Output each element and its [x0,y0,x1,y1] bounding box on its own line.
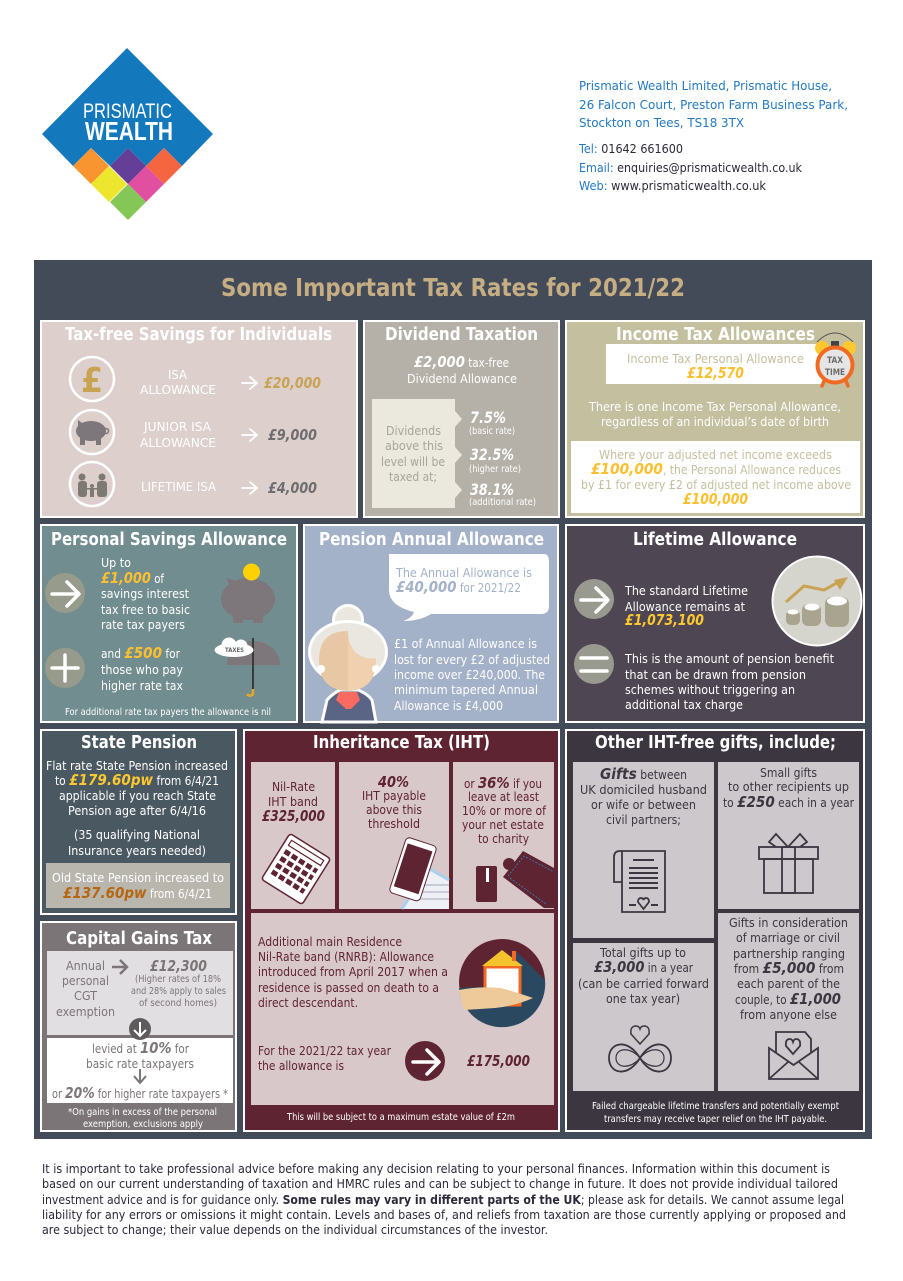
note: This will be subject to a maximum estate value of £2m [286,1112,515,1123]
icon: heart and infinity [609,1026,671,1072]
personal allowance box: £12,570 [687,364,744,382]
box: marriage gifts: from anyone else [740,1008,837,1022]
text: definition: additional tax charge [625,698,743,712]
icon: down arrow circle [129,1018,151,1040]
box: 36 percent [453,762,554,909]
icon: alarm clock [815,333,856,386]
text: up to 1000: tax free to basic [101,603,190,617]
box: 40 percent: IHT payable [362,789,426,803]
row: junior ISA allowance: JUNIOR ISA [143,419,211,434]
box: spouse gifts: UK domiciled husband [580,783,707,797]
contact details: Email: enquiries@prismaticwealth.co.uk [579,161,803,175]
old state pension box: £137.60pw from 6/4/21 [63,884,212,902]
box: spouse gifts: or wife or between [591,798,696,812]
disclaimer: investment advice and is for guidance only. Some rules may vary in different parts of the UK; please ask for details. We cannot assume legal [42,1193,844,1207]
box: marriage gifts [718,913,859,1091]
taper box: Where your adjusted net income exceeds [599,448,832,462]
taper box [571,441,860,513]
panel: tax-free savings [41,321,357,517]
text: flat rate: Pension age after 6/4/16 [68,804,206,818]
text: definition: This is the amount of pension benefit [624,652,834,666]
panel: state pension [41,730,236,914]
heading: other gifts: Other IHT-free gifts, include; [595,733,836,753]
levied box: basic rate taxpayers [86,1057,194,1071]
box: marriage gifts: couple, to £1,000 [735,990,841,1008]
company address: Stockton on Tees, TS18 3TX [579,116,744,130]
icon: paper [402,868,449,909]
title: Some Important Tax Rates for 2021/22 [221,273,685,302]
personal allowance box: Income Tax Personal Allowance [627,352,804,366]
rates: (additional rate) [469,497,536,508]
text: taper: lost for every £2 of adjusted [394,653,550,667]
heading: lifetime allowance: Lifetime Allowance [633,530,797,550]
levied box [47,1038,233,1103]
box: total gifts: Total gifts up to [599,946,686,960]
text: up to 1000: £1,000 of [101,569,165,587]
heading: inheritance tax: Inheritance Tax (IHT) [313,733,490,753]
text: flat rate: applicable if you reach State [59,789,216,803]
row: ISA allowance [140,367,321,397]
pointer box: level will be [381,455,445,469]
box: total gifts: one tax year) [606,992,680,1006]
panel: income tax allowances [566,321,864,517]
icon: piggy bank [70,410,114,454]
levied box: or 20% for higher rate taxpayers * [52,1084,228,1102]
dividend allowance: £2,000 tax-free [414,353,509,371]
box: 40 percent: above this [366,803,422,817]
icon: piggy bank and coin [221,564,275,623]
icon: umbrella with cloud [214,638,280,696]
speech bubble: £40,000 for 2021/22 [396,578,521,596]
icon: equals circle [574,644,614,684]
rates [469,408,536,508]
personal allowance box [606,344,823,384]
contact details [578,142,803,193]
text: RNRB [258,935,448,1010]
box: residence nil-rate band [251,913,554,1105]
panel: other IHT-free gifts [566,730,864,1131]
text: standard allowance: The standard Lifetime [624,584,748,598]
dividend allowance: Dividend Allowance [407,372,517,386]
text: RNRB: Nil-Rate band (RNRB): Allowance [258,950,434,964]
text: standard allowance: £1,073,100 [625,611,704,629]
row: ISA allowance: ISA [168,367,187,382]
text: standard allowance: Allowance remains at [625,600,745,614]
box: total gifts [573,943,714,1091]
text: up to 1000: savings interest [101,587,189,601]
heading: capital gains tax: Capital Gains Tax [66,929,213,949]
box: nil-rate band [251,762,335,909]
exemption box: of second homes) [139,998,217,1009]
text: RNRB: introduced from April 2017 when a [258,965,448,979]
heading: tax-free savings: Tax-free Savings for Individuals [65,325,332,345]
icon: house in hand [459,939,545,1027]
text: flat rate: to £179.60pw from 6/4/21 [55,771,219,789]
text: up to 1000: rate tax payers [101,618,185,632]
value: £175,000 [467,1052,530,1070]
icon: envelope with heart [769,1032,818,1079]
exemption box: (Higher rates of 18% [135,974,221,985]
note: For additional rate tax payers the allowance is nil [65,707,271,718]
heading: pension annual allowance: Pension Annual Allowance [319,530,544,550]
main dark panel [34,260,872,1139]
logo: Prismatic Wealth [42,48,213,220]
row: lifetime ISA: £4,000 [268,479,317,497]
panel: dividend taxation [364,321,559,517]
rates: (basic rate) [469,426,515,437]
panel: capital gains tax [41,922,236,1131]
box: 40 percent: threshold [368,817,420,831]
icon: arrow circle [574,579,614,619]
text: flat rate: (35 qualifying National [74,828,200,842]
row: ISA allowance: £20,000 [264,374,321,392]
box: marriage gifts: from £5,000 from [734,959,844,977]
icon: coins and rising arrow [772,556,862,646]
rates: 32.5% [470,445,514,464]
text: taper: £1 of Annual Allowance is [394,637,537,651]
icon: plus circle [45,648,85,688]
disclaimer: liability for any errors or omissions it might contain. Levels and bases of, and reliefs from taxation are those currently applying or proposed and [42,1208,846,1222]
icon: arrow circle [405,1041,445,1081]
text: and 500 [101,644,183,693]
panel: personal savings allowance [41,525,297,722]
icon: calculator [261,833,331,905]
row: ISA allowance: ALLOWANCE [140,382,216,397]
box: marriage gifts: Gifts in consideration [729,916,848,930]
pointer box: above this [385,439,443,453]
icon: card [476,866,497,902]
footnote [68,1107,217,1130]
text: RNRB: residence is passed on death to a [258,981,439,995]
disclaimer [42,1162,846,1237]
text: taper: minimum tapered Annual [394,683,538,697]
heading: state pension: State Pension [81,733,197,753]
box: small gifts [718,762,859,909]
box: nil-rate band: £325,000 [262,807,325,825]
taper box: £100,000, the Personal Allowance reduces [591,460,841,478]
panel: lifetime allowance [566,525,864,722]
logo: Prismatic Wealth: WEALTH [85,116,173,146]
text: up to 1000 [101,556,190,632]
speech bubble [389,554,549,621]
panel: pension annual allowance [304,525,558,722]
box: marriage gifts: each parent of the [737,977,840,991]
rates: 7.5% [470,408,506,427]
box: 40 percent [339,762,449,909]
box: nil-rate band: IHT band [268,795,318,809]
rates: (higher rate) [469,464,521,475]
heading: personal savings allowance: Personal Savings Allowance [51,530,287,550]
note: transfers may receive taper relief on the IHT payable. [604,1114,827,1125]
box: spouse gifts: civil partners; [606,813,681,827]
footnote: exemption, exclusions apply [83,1119,203,1130]
company address: Prismatic Wealth Limited, Prismatic House, [579,79,832,93]
icon: arrow circle [45,573,85,613]
disclaimer: It is important to take professional advice before making any decision relating to your personal finances. Information within this document is [42,1162,830,1176]
box: small gifts: to other recipients up [728,780,849,794]
icon: pound: £ [81,361,103,401]
pointer box [372,399,462,508]
disclaimer: are subject to change; their value depends on the individual circumstances of the investor. [42,1223,548,1237]
icon: certificate [614,851,665,912]
icon: gift [759,834,818,893]
text: definition [624,652,834,712]
exemption box: exemption [56,1005,115,1019]
text: flat rate [46,759,228,858]
box: 36 percent: 10% or more of [462,804,547,818]
text: taper: Allowance is £4,000 [394,699,503,713]
statement: regardless of an individual’s date of birth [601,415,829,429]
text: taper [394,637,550,713]
row: lifetime ISA [141,479,317,497]
row: junior ISA allowance [140,419,317,450]
exemption box: personal [62,974,109,988]
exemption box: £12,300 [150,957,207,975]
text: flat rate: Flat rate State Pension increased [46,759,228,773]
company address [579,79,848,130]
exemption box: CGT [74,989,98,1003]
box: spouse gifts [573,762,714,938]
contact details: Web: www.prismaticwealth.co.uk [579,179,767,193]
taper box: £100,000 [683,490,748,508]
text: allowance amount [258,1044,392,1073]
contact details: Tel: 01642 661600 [578,142,683,156]
text: RNRB: direct descendant. [258,996,358,1010]
company address: 26 Falcon Court, Preston Farm Business Park, [579,98,848,112]
levied box: levied at 10% for [92,1039,190,1057]
text: standard allowance [624,584,748,629]
box: total gifts: (can be carried forward [578,977,709,991]
exemption box [47,951,233,1035]
text: definition: that can be drawn from pension [625,668,806,682]
pointer box: Dividends [386,424,441,438]
disclaimer: based on our current understanding of taxation and HMRC rules and can be subject to change in future. It does not provide individual tailored [42,1177,838,1191]
box: nil-rate band: Nil-Rate [272,780,315,794]
taper box: by £1 for every £2 of adjusted net income above [581,478,851,492]
icon: alarm clock: TIME [825,368,845,378]
statement: There is one Income Tax Personal Allowance, [588,400,841,414]
box: small gifts: to £250 each in a year [723,793,855,811]
box: 36 percent: your net estate [462,818,544,832]
footnote: *On gains in excess of the personal [68,1107,217,1118]
old state pension box [46,863,230,908]
box: total gifts: £3,000 in a year [594,958,694,976]
logo: Prismatic Wealth: PRISMATIC [83,100,172,123]
old state pension box: Old State Pension increased to [52,871,224,885]
text: and 500: those who pay [101,663,183,677]
box: 36 percent: leave at least [468,790,539,804]
row: junior ISA allowance: ALLOWANCE [140,435,216,450]
icon: card mark [486,868,489,882]
note: Failed chargeable lifetime transfers and potentially exempt [592,1101,839,1112]
illustration: elderly woman [310,606,386,722]
icon: alarm clock: TAX [827,356,843,366]
icon: umbrella with cloud: TAXES [225,646,244,654]
box: 36 percent: or 36% if you [464,774,542,792]
box: 36 percent: to charity [478,832,529,846]
heading: dividend taxation: Dividend Taxation [385,325,538,345]
text: flat rate: Insurance years needed) [68,844,206,858]
icon: family [70,462,114,506]
text: and 500: and £500 for [101,644,181,662]
text: allowance amount: the allowance is [258,1059,344,1073]
box: spouse gifts: Gifts between [600,765,687,783]
pointer box: taxed at; [389,470,437,484]
statement [588,400,841,429]
text: and 500: higher rate tax [101,679,183,693]
rates: 38.1% [470,480,514,499]
heading: income tax allowances: Income Tax Allowances [616,325,815,345]
box: marriage gifts: of marriage or civil [736,931,840,945]
speech bubble: The Annual Allowance is [395,566,532,580]
dividend allowance [407,353,517,386]
text: RNRB: Additional main Residence [258,935,402,949]
note [592,1101,839,1125]
icon: pound [70,357,114,401]
exemption box: and 28% apply to sales [131,986,226,997]
icon: smartphone [389,837,437,902]
text: definition: schemes without triggering an [625,683,795,697]
text: taper: income over £240,000. The [394,668,545,682]
row: lifetime ISA: LIFETIME ISA [141,479,216,494]
box: 40 percent: 40% [377,773,409,791]
text: up to 1000: Up to [101,556,131,570]
exemption box: Annual [66,959,105,973]
box: small gifts: Small gifts [760,766,817,780]
row: junior ISA allowance: £9,000 [268,426,317,444]
box: marriage gifts: partnership ranging [733,947,845,961]
text: allowance amount: For the 2021/22 tax year [258,1044,392,1058]
icon: wallet [503,851,554,908]
panel: inheritance tax [244,730,559,1131]
